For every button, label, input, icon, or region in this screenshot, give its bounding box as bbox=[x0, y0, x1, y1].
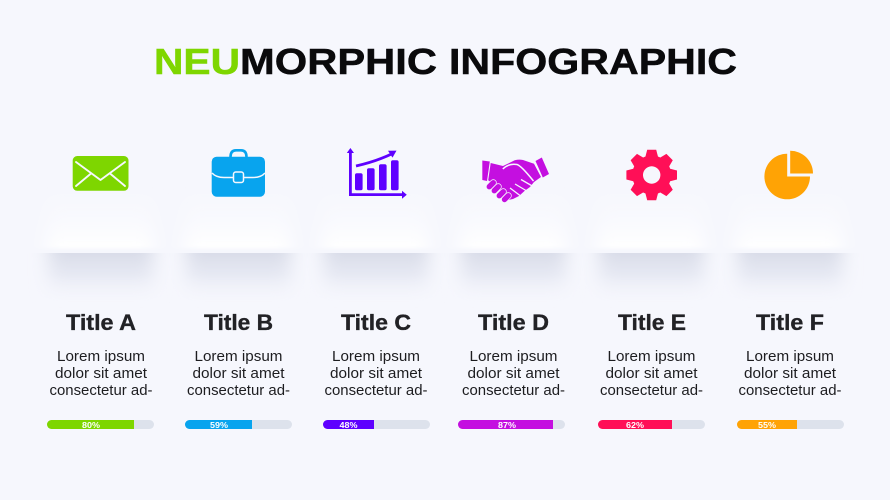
progress bar: 87% bbox=[458, 420, 565, 430]
title bbox=[154, 41, 737, 82]
progress bar: 80% bbox=[47, 420, 154, 430]
text block: C bbox=[324, 349, 428, 399]
progress bar: 59% bbox=[185, 420, 292, 430]
heading: Title D: Title D bbox=[478, 310, 549, 335]
progress bar: 55%: 55% bbox=[758, 421, 776, 430]
text block: F: dolor sit amet bbox=[744, 366, 836, 382]
text block: B: consectetur ad- bbox=[187, 383, 290, 399]
icon: gear bbox=[626, 150, 677, 200]
text block: B: dolor sit amet bbox=[192, 366, 284, 382]
title: INFOGRAPHIC bbox=[449, 41, 737, 82]
text block: D: Lorem ipsum bbox=[470, 349, 558, 365]
text block: A bbox=[50, 349, 153, 399]
text block: E: Lorem ipsum bbox=[608, 349, 696, 365]
icon: envelope bbox=[73, 156, 128, 191]
heading: Title B: Title B bbox=[204, 310, 273, 335]
title: NEU bbox=[154, 41, 240, 82]
progress bar: 48% bbox=[323, 420, 430, 430]
icon: handshake bbox=[482, 158, 549, 200]
text block: A: Lorem ipsum bbox=[57, 349, 145, 365]
text block: F: consectetur ad- bbox=[738, 383, 842, 399]
progress bar: 80%: 80% bbox=[82, 421, 100, 430]
progress bar: 48%: 48% bbox=[340, 421, 358, 430]
progress bar: 87%: 87% bbox=[498, 421, 516, 430]
icon: briefcase bbox=[212, 150, 265, 197]
heading: Title A: Title A bbox=[66, 310, 136, 335]
progress bar: 62%: 62% bbox=[626, 421, 644, 430]
text block: E bbox=[600, 349, 703, 399]
text block: C: dolor sit amet bbox=[330, 366, 422, 382]
heading: Title F: Title F bbox=[756, 310, 824, 335]
text block: E: consectetur ad- bbox=[600, 383, 703, 399]
text block: C: consectetur ad- bbox=[324, 383, 428, 399]
text block: D: consectetur ad- bbox=[462, 383, 565, 399]
panel: column D bbox=[458, 158, 566, 430]
icon: pie chart bbox=[764, 151, 813, 199]
panel: column F bbox=[736, 151, 844, 430]
title: MORPHIC bbox=[240, 41, 437, 82]
heading: Title E: Title E bbox=[618, 310, 686, 335]
progress bar: 62% bbox=[598, 420, 705, 430]
text block: A: dolor sit amet bbox=[55, 366, 147, 382]
text block: D: dolor sit amet bbox=[468, 366, 560, 382]
text block: D bbox=[462, 349, 565, 399]
heading: Title C: Title C bbox=[341, 310, 411, 335]
progress bar: 59%: 59% bbox=[210, 421, 228, 430]
text block: F bbox=[738, 349, 842, 399]
panel: column C bbox=[322, 148, 430, 430]
progress bar: 55% bbox=[737, 420, 844, 430]
panel: column E bbox=[598, 150, 705, 430]
text block: A: consectetur ad- bbox=[50, 383, 153, 399]
panel: column B bbox=[184, 150, 292, 430]
text block: B bbox=[187, 349, 290, 399]
text block: E: dolor sit amet bbox=[606, 366, 698, 382]
panel: column A bbox=[47, 156, 154, 430]
text block: B: Lorem ipsum bbox=[194, 349, 282, 365]
text block: C: Lorem ipsum bbox=[332, 349, 420, 365]
icon: rising bar chart bbox=[347, 148, 407, 199]
text block: F: Lorem ipsum bbox=[746, 349, 834, 365]
